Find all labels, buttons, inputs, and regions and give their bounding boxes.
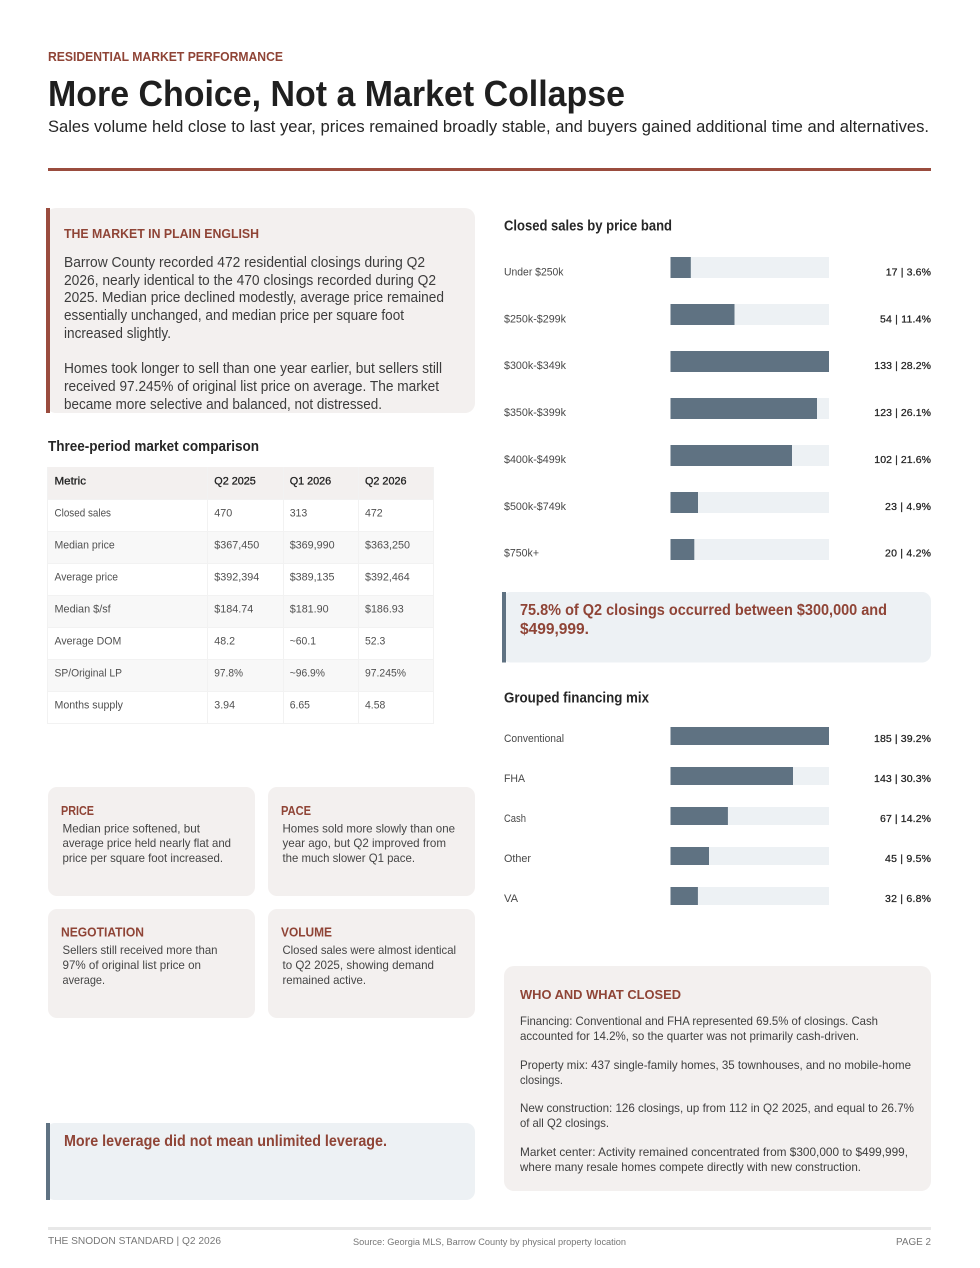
bar: under 250k (504, 257, 931, 278)
bar: FHA: FHA (504, 773, 526, 785)
paragraph: property mix: closings. (520, 1073, 563, 1087)
bar: cash: 67 | 14.2% (880, 813, 931, 825)
table header row (54, 476, 406, 488)
row: months supply: Months supply (54, 700, 123, 712)
heading: three-period comparison: Three-period market comparison (48, 439, 259, 455)
row: median price per sf: $184.74 (214, 604, 253, 616)
paragraph: market center: where many resale homes compete directly with new construction. (519, 1160, 861, 1174)
table header row: Q2 2026 (365, 476, 406, 488)
card: price: average price held nearly flat and (62, 836, 231, 850)
paragraph: financing: accounted for 14.2%, so the quarter was not primarily cash-driven. (520, 1029, 859, 1043)
bar: 500k to 749k: 23 | 4.9% (885, 501, 931, 513)
card: price: Median price softened, but (62, 822, 201, 836)
panel heading: THE MARKET IN PLAIN ENGLISH (64, 226, 259, 241)
bar: cash: Cash (504, 813, 526, 825)
row: SP to original LP: ~96.9% (290, 668, 325, 680)
row: median price per sf (54, 604, 404, 616)
bar: 300k to 349k: $300k-$349k (504, 360, 566, 372)
card: negotiation: average. (62, 973, 105, 987)
card: negotiation: NEGOTIATION (61, 924, 144, 940)
row: closed sales: Closed sales (54, 508, 111, 520)
card: volume: VOLUME (281, 924, 332, 940)
paragraph: property mix (520, 1058, 911, 1087)
row: months supply: 4.58 (365, 700, 385, 712)
row: average DOM (54, 636, 385, 648)
footer: THE SNODON STANDARD | Q2 2026 (48, 1235, 221, 1247)
bar: 300k to 349k: 133 | 28.2% (874, 360, 931, 372)
bar: 350k to 399k (504, 398, 931, 419)
card: negotiation (48, 909, 255, 1018)
paragraph: property mix: Property mix: 437 single-family homes, 35 townhouses, and no mobile-home (520, 1058, 911, 1072)
panel body text: essentially unchanged, and median price per square foot (64, 308, 404, 324)
panel: who and what closed (504, 966, 931, 1191)
bar: 250k to 299k (504, 304, 931, 326)
card: volume (268, 909, 475, 1018)
card: pace: year ago, but Q2 improved from (282, 836, 446, 850)
row: SP to original LP: 97.245% (365, 668, 406, 680)
card: negotiation: 97% of original list price on (62, 958, 201, 972)
card: volume: Closed sales were almost identical (282, 943, 456, 957)
footer: Source: Georgia MLS, Barrow County by physical property location (353, 1237, 626, 1247)
bar: conventional (504, 727, 931, 745)
bar: 250k to 299k: $250k-$299k (504, 314, 566, 326)
bar: VA: 32 | 6.8% (885, 893, 931, 905)
bar: under 250k: Under $250k (504, 266, 564, 278)
bar: 750k plus: 20 | 4.2% (885, 548, 931, 560)
bar: 300k to 349k (504, 351, 931, 372)
row: average DOM: 52.3 (365, 636, 385, 648)
row: median price per sf: $181.90 (290, 604, 329, 616)
table header row: Q2 2025 (214, 476, 256, 488)
panel: the market in plain english (46, 208, 475, 413)
bar: 350k to 399k: 123 | 26.1% (874, 407, 931, 419)
card: price: price per square foot increased. (62, 851, 223, 865)
bar chart: grouped financing mix (504, 727, 931, 905)
paragraph: new construction (520, 1101, 914, 1130)
bar: 750k plus: $750k+ (504, 548, 539, 560)
bar: other: 45 | 9.5% (885, 853, 931, 865)
bar: 250k to 299k: 54 | 11.4% (880, 314, 931, 326)
row: months supply (54, 700, 385, 712)
bar: 400k to 499k (504, 445, 931, 466)
row: SP to original LP (54, 668, 406, 680)
panel body text: 2026, nearly identical to the 470 closings recorded during Q2 (64, 273, 436, 289)
panel heading: WHO AND WHAT CLOSED (520, 987, 681, 1002)
title: More Choice, Not a Market Collapse (48, 73, 625, 114)
paragraph: market center: Market center: Activity remained concentrated from $300,000 to $499,999, (520, 1145, 908, 1159)
footer (48, 1235, 931, 1248)
row: SP to original LP: 97.8% (214, 668, 243, 680)
callout: 75.8 percent (502, 592, 931, 662)
row: closed sales: 472 (365, 508, 383, 520)
callout: leverage: More leverage did not mean unlimited leverage. (64, 1133, 387, 1150)
paragraph: financing: Financing: Conventional and FHA represented 69.5% of closings. Cash (520, 1014, 878, 1028)
row: average DOM: 48.2 (214, 636, 235, 648)
card: pace (268, 787, 475, 896)
panel body text: became more selective and balanced, not distressed. (64, 397, 382, 413)
row: closed sales: 313 (290, 508, 307, 520)
panel body text (64, 255, 444, 413)
paragraph: market center (519, 1145, 908, 1174)
bar: FHA: 143 | 30.3% (874, 773, 931, 785)
card: pace: PACE (281, 803, 311, 818)
card: volume: remained active. (282, 973, 366, 987)
panel body text: received 97.245% of original list price on average. The market (64, 379, 439, 395)
callout: 75.8 percent: $499,999. (520, 621, 589, 638)
row: closed sales: 470 (214, 508, 232, 520)
bar: 400k to 499k: $400k-$499k (504, 454, 566, 466)
bar: cash (504, 807, 931, 825)
footer: PAGE 2 (896, 1236, 931, 1248)
bar: conventional: Conventional (504, 733, 564, 745)
heading: closed sales by price band: Closed sales by price band (504, 218, 672, 234)
header (48, 49, 929, 136)
row: average price: $389,135 (290, 572, 334, 584)
row: average price: $392,464 (365, 572, 410, 584)
bar: FHA (504, 767, 931, 785)
row: average DOM: Average DOM (54, 636, 121, 648)
row: average price: $392,394 (214, 572, 259, 584)
row: median price per sf: $186.93 (365, 604, 404, 616)
bar: 400k to 499k: 102 | 21.6% (874, 454, 931, 466)
bar: VA: VA (504, 893, 519, 905)
card: pace: the much slower Q1 pace. (282, 851, 415, 865)
row: median price: Median price (54, 540, 115, 552)
row: closed sales (54, 508, 383, 520)
callout: 75.8 percent: 75.8% of Q2 closings occurred between $300,000 and (520, 602, 887, 619)
panel body text: Barrow County recorded 472 residential closings during Q2 (64, 255, 425, 271)
row: SP to original LP: SP/Original LP (54, 668, 122, 680)
card: pace: Homes sold more slowly than one (282, 822, 455, 836)
row: median price per sf: Median $/sf (54, 604, 112, 616)
paragraph: financing (520, 1014, 878, 1043)
table header row: Metric (54, 476, 87, 488)
row: average price (54, 572, 410, 584)
bar chart: closed sales by price band (504, 257, 931, 560)
row: median price: $363,250 (365, 540, 410, 552)
bar: 500k to 749k: $500k-$749k (504, 501, 566, 513)
panel body text: increased slightly. (64, 326, 171, 342)
callout: leverage (46, 1123, 475, 1200)
bar: 350k to 399k: $350k-$399k (504, 407, 566, 419)
table: market comparison (48, 467, 434, 724)
row: months supply: 6.65 (290, 700, 310, 712)
panel body text: Homes took longer to sell than one year earlier, but sellers still (64, 361, 442, 377)
table header row: Q1 2026 (290, 476, 331, 488)
bar: VA (504, 887, 931, 905)
panel body text: 2025. Median price declined modestly, average price remained (64, 290, 444, 306)
bar: 500k to 749k (504, 492, 931, 513)
row: median price: $367,450 (214, 540, 259, 552)
heading: grouped financing mix: Grouped financing mix (504, 690, 649, 706)
row: average DOM: ~60.1 (290, 636, 316, 648)
bar: other (504, 847, 931, 865)
card: volume: to Q2 2025, showing demand (282, 958, 434, 972)
paragraph: new construction: of all Q2 closings. (520, 1116, 609, 1130)
bar: conventional: 185 | 39.2% (874, 733, 931, 745)
eyebrow: RESIDENTIAL MARKET PERFORMANCE (48, 49, 283, 64)
subtitle: Sales volume held close to last year, prices remained broadly stable, and buyers gained additional time and alternatives. (48, 117, 929, 136)
row: median price: $369,990 (290, 540, 335, 552)
bar: 750k plus (504, 539, 931, 560)
row: median price (54, 540, 410, 552)
bar: other: Other (504, 853, 531, 865)
row: average price: Average price (54, 572, 118, 584)
paragraph: new construction: New construction: 126 closings, up from 112 in Q2 2025, and equal to 26.7% (520, 1101, 914, 1115)
row: months supply: 3.94 (214, 700, 235, 712)
card: price: PRICE (61, 803, 94, 818)
card: negotiation: Sellers still received more than (62, 943, 218, 957)
card: price (48, 787, 255, 896)
bar: under 250k: 17 | 3.6% (886, 266, 931, 278)
